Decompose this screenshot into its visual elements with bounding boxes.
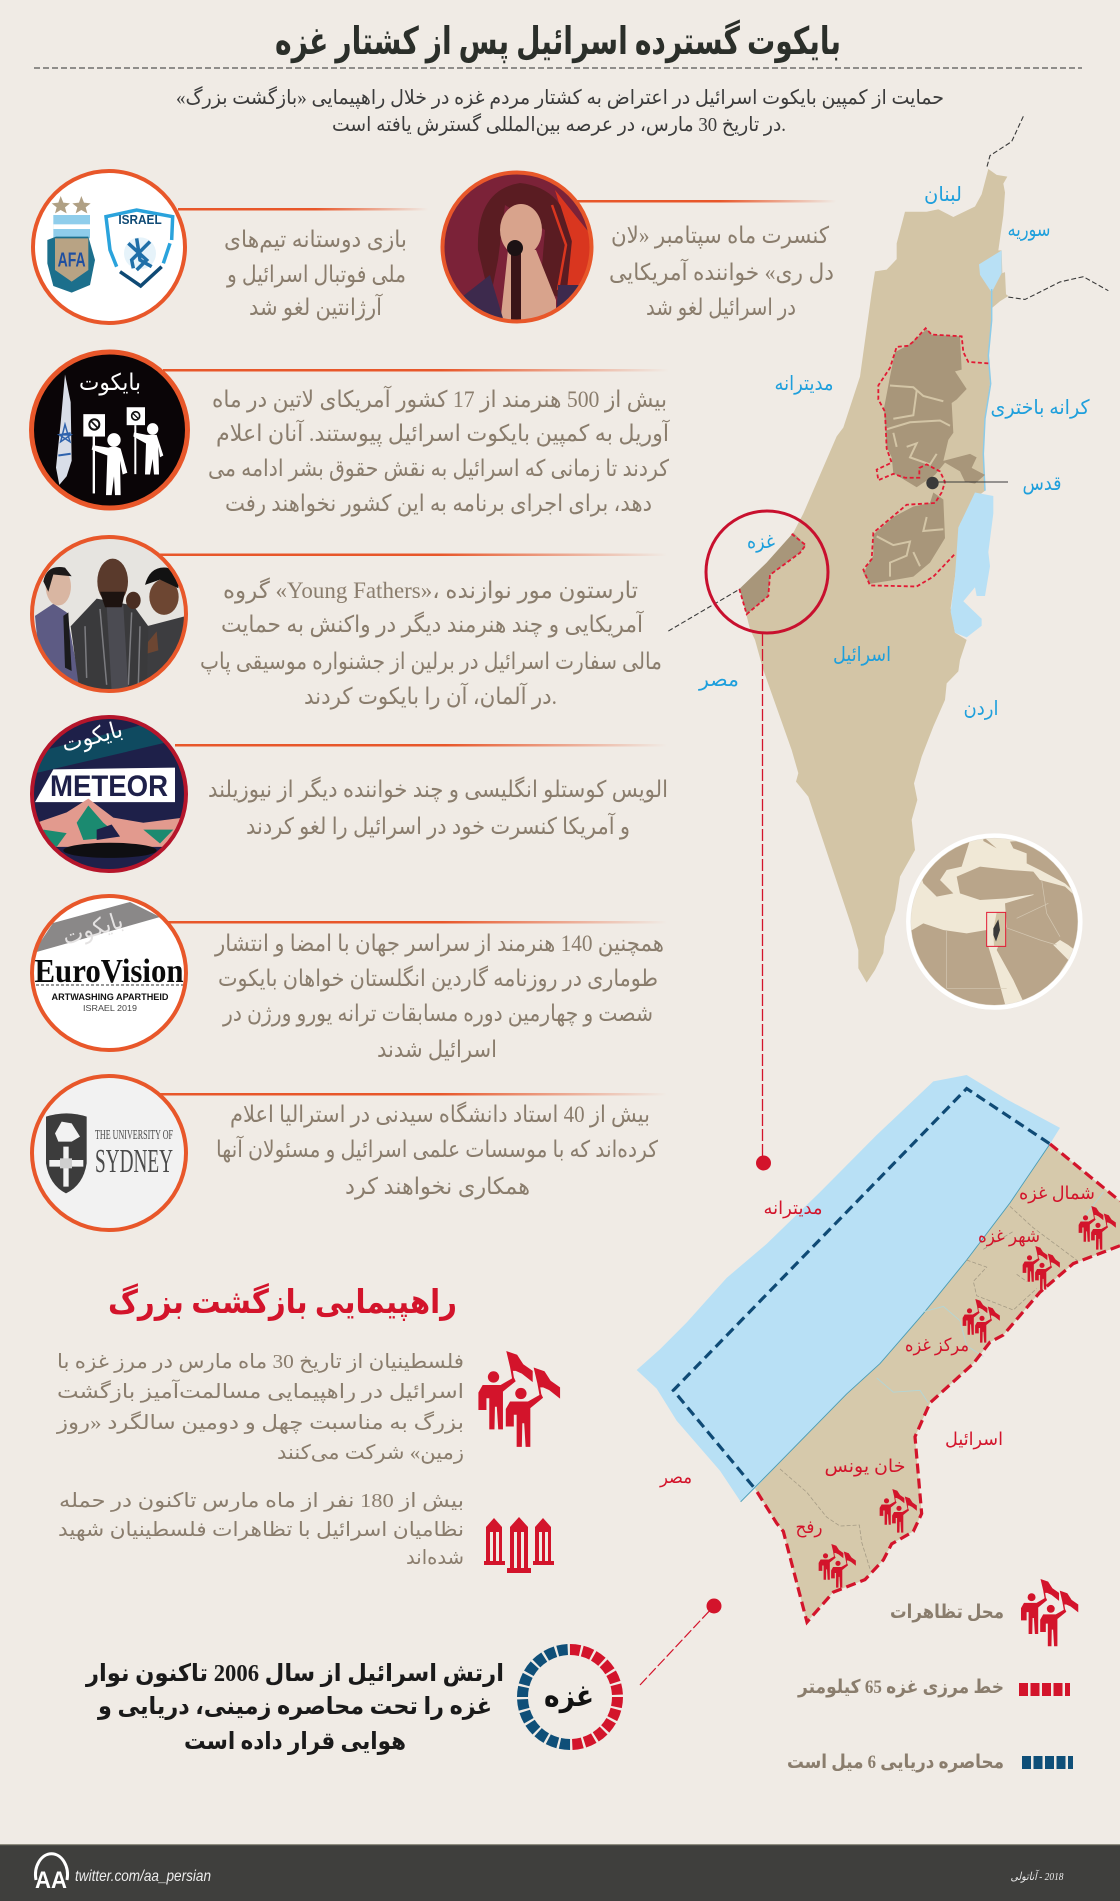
panel: Latin American artists — [32, 352, 671, 517]
text: بیش از 500 هنرمند از 17 کشور آمریکای لاتین در ماه — [212, 385, 667, 413]
text: آرژانتین لغو شد — [249, 293, 383, 321]
text block: blockade statement: ارتش اسرائیل از سال 2006 تاکنون نوار — [85, 1661, 504, 1687]
connector lines — [160, 200, 836, 1096]
text block: march description: اسرائیل در راهپیمایی مسالمت‌آمیز بازگشت — [57, 1378, 464, 1404]
neighbouring borders — [668, 116, 1108, 631]
footer bar — [0, 1844, 1120, 1901]
text: در آلمان، آن را بایکوت کردند. — [304, 682, 557, 710]
gaza map labels: شمال غزه — [1019, 1183, 1095, 1204]
land area — [755, 1144, 1120, 1622]
border dashed line — [755, 1144, 1120, 1622]
West Bank — [884, 329, 985, 487]
text — [208, 776, 668, 840]
legend: protest site — [890, 1579, 1078, 1646]
text — [200, 577, 662, 710]
legend: protest site: محل تظاهرات — [890, 1602, 1004, 1623]
image: Eurovision logo: بایکوت — [60, 908, 126, 951]
text: ملی فوتبال اسرائیل و — [226, 262, 406, 288]
connector: ring to gaza map — [640, 1598, 722, 1685]
marker: Jerusalem — [926, 477, 1008, 489]
text — [208, 385, 671, 517]
icon: circle around Gaza — [706, 511, 828, 633]
inset globe map — [907, 835, 1083, 1010]
text — [609, 223, 834, 321]
text: همکاری نخواهند کرد — [345, 1174, 530, 1200]
text: مالی سفارت اسرائیل در برلین از جشنواره موسیقی پاپ — [200, 649, 662, 675]
photo: band — [34, 539, 184, 689]
text: الویس کوستلو انگلیسی و چند خواننده دیگر از نیوزیلند — [208, 776, 668, 803]
map labels: کرانه باختری — [990, 397, 1090, 419]
map labels: سوریه — [1008, 219, 1050, 241]
image: Eurovision logo — [34, 898, 184, 1048]
text — [216, 1101, 658, 1200]
text block: casualties — [58, 1490, 464, 1569]
text: طوماری در روزنامه گاردین انگلستان خواهان بایکوت — [218, 965, 658, 992]
gaza map labels: خان یونس — [824, 1456, 906, 1477]
intro text: حمایت از کمپین بایکوت اسرائیل در اعتراض به کشتار مردم غزه در خلال راهپیمایی «بازگشت بزرگ» — [176, 86, 944, 110]
gaza strip detail map — [637, 1075, 1120, 1622]
text: کنسرت ماه سپتامبر «لان — [611, 223, 829, 249]
text: و آمریکا کنسرت خود در اسرائیل را لغو کردند — [246, 812, 630, 840]
image: Sydney logo: SYDNEY — [95, 1143, 173, 1180]
image: boycott sign — [32, 352, 188, 508]
text block: march description: فلسطینیان از تاریخ 30 ماه مارس در مرز غزه با — [57, 1351, 464, 1373]
text block: blockade statement: هوایی قرار داده است — [184, 1729, 406, 1755]
gaza map labels: شهر غزه — [978, 1226, 1040, 1247]
text — [224, 227, 407, 321]
text — [214, 931, 664, 1063]
text: کرده‌اند که با موسسات علمی اسرائیل و مسئولان آنها — [216, 1135, 658, 1163]
text: بازی دوستانه تیم‌های — [224, 227, 407, 253]
panel: football match — [33, 171, 407, 323]
legend: gaza border: خط مرزی غزه 65 کیلومتر — [797, 1677, 1004, 1698]
map labels: اسرائیل — [833, 644, 891, 666]
gaza map labels — [659, 1183, 1095, 1538]
image: Eurovision logo: ARTWASHING APARTHEID — [52, 992, 169, 1003]
title: بایکوت گسترده اسرائیل پس از کشتار غزه — [275, 19, 841, 63]
footer link: twitter.com/aa_persian — [75, 1868, 211, 1885]
map labels: مصر — [698, 669, 739, 691]
map labels — [698, 184, 1090, 720]
text block: march description: بزرگ به مناسبت چهل و دومین سالگرد «روز — [56, 1411, 464, 1434]
intro text: در تاریخ 30 مارس، در عرصه بین‌المللی گسترش یافته است. — [332, 113, 786, 136]
text block: casualties: بیش از 180 نفر از ماه مارس تاکنون در حمله — [59, 1490, 464, 1512]
intro text — [176, 86, 944, 136]
image: Meteor poster: METEOR — [50, 770, 168, 803]
text: آوریل به کمپین بایکوت اسرائیل پیوستند. آنان اعلام — [216, 419, 671, 447]
country outline — [740, 169, 1008, 983]
panel: Lana Del Rey concert — [440, 170, 834, 325]
gaza map labels: اسرائیل — [945, 1429, 1003, 1450]
text: در اسرائیل لغو شد — [646, 295, 796, 321]
Gaza on main map — [739, 533, 806, 614]
panel: Young Fathers — [30, 533, 662, 710]
panel: Meteor festival — [30, 712, 668, 874]
credit: 2018 - آناتولی — [1010, 1869, 1064, 1883]
panel: Eurovision — [30, 895, 664, 1063]
protest markers on gaza map — [819, 1206, 1116, 1588]
text block: blockade statement: غزه را تحت محاصره زمینی، دریایی و — [97, 1694, 492, 1720]
text block: casualties: نظامیان اسرائیل با تظاهرات فلسطینیان شهید — [58, 1519, 464, 1541]
text: اسرائیل شدند — [377, 1037, 497, 1063]
map labels: اردن — [964, 698, 998, 720]
blockade dashed line — [673, 1089, 1050, 1487]
logos: ISRAEL — [118, 212, 162, 227]
image: Sydney logo: THE UNIVERSITY OF — [95, 1128, 173, 1143]
connector: Gaza to detail map — [756, 634, 771, 1170]
map labels: لبنان — [924, 184, 962, 206]
logos — [47, 196, 173, 293]
text block: march description: زمین» شرکت می‌کنند — [277, 1442, 464, 1464]
image: Eurovision logo: EuroVision — [34, 953, 184, 990]
text: شصت و چهارمین دوره مسابقات ترانه یورو ورژن در — [222, 1001, 653, 1027]
sea of Galilee, Jordan river and Dead Sea — [979, 250, 1002, 292]
heading: great return march: راهپیمایی بازگشت بزرگ — [108, 1282, 457, 1322]
gaza map labels: مصر — [659, 1467, 692, 1488]
panel: University of Sydney — [32, 1076, 658, 1230]
icon: gaza ring: غزه — [544, 1680, 594, 1713]
icon: AA logo: AA — [35, 1867, 67, 1894]
sea area — [637, 1075, 1060, 1502]
gaza map labels: مدیترانه — [764, 1198, 822, 1219]
text: دهد، برای اجرای برنامه به این کشور نخواهند رفت — [225, 491, 652, 517]
text: کردند تا زمانی که اسرائیل به نقش حقوق بشر ادامه می — [208, 456, 669, 482]
map labels: غزه — [747, 531, 775, 553]
text: آمریکایی و چند هنرمند دیگر در واکنش به حمایت — [221, 610, 645, 638]
icon: protesters with flags — [478, 1351, 560, 1447]
text block: casualties: شده‌اند — [406, 1547, 464, 1569]
text: بیش از 40 استاد دانشگاه سیدنی در استرالیا اعلام — [230, 1101, 650, 1128]
gaza map labels: مرکز غزه — [905, 1335, 969, 1356]
image: boycott sign: بایکوت — [79, 370, 141, 396]
text block: blockade statement — [85, 1661, 504, 1755]
legend: sea blockade: محاصره دریایی 6 میل است — [787, 1752, 1004, 1773]
logos: AFA — [58, 249, 86, 272]
map: Israel and Palestine — [668, 116, 1108, 983]
image: Meteor poster — [34, 719, 184, 869]
text: همچنین 140 هنرمند از سراسر جهان با امضا و انتشار — [214, 931, 664, 957]
gaza map labels: رفح — [796, 1517, 822, 1538]
image: Meteor poster: بایکوت — [59, 717, 125, 758]
image: Eurovision logo: ISRAEL 2019 — [83, 1003, 137, 1013]
image: Sydney logo — [32, 1076, 186, 1230]
text: دل ری» خواننده آمریکایی — [609, 258, 834, 286]
text: تارستون مور نوازنده ،«Young Fathers» گروه — [223, 577, 638, 604]
map labels: مدیترانه — [774, 373, 834, 395]
icon: graves — [484, 1517, 554, 1573]
photo: singer — [444, 174, 590, 320]
map labels: قدس — [1022, 473, 1062, 495]
text block: march description — [56, 1351, 464, 1464]
icon: AA logo — [35, 1854, 68, 1894]
icon: gaza ring — [523, 1650, 618, 1744]
